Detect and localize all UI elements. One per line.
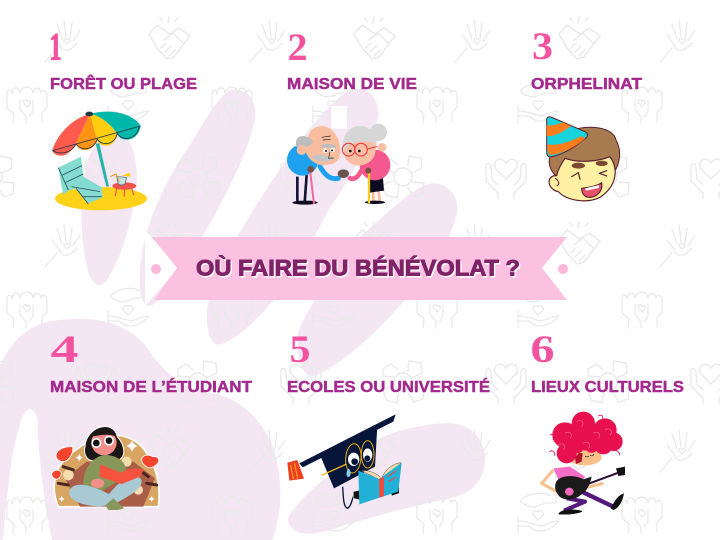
banner title: OÙ FAIRE DU BÉNÉVOLAT ? — [196, 256, 520, 281]
banner left dot — [151, 264, 161, 274]
banner — [145, 230, 568, 306]
item 5 — [287, 328, 490, 508]
background blobs — [0, 89, 485, 540]
number 3: 3 — [532, 25, 553, 68]
item 3 — [531, 25, 643, 201]
label 5: ECOLES OU UNIVERSITÉ — [287, 379, 490, 396]
icon: girl reading — [52, 426, 159, 510]
label 2: MAISON DE VIE — [287, 76, 417, 93]
item 4 — [50, 328, 253, 510]
number 1: 1 — [50, 26, 62, 68]
icon: graduation cap with book — [287, 414, 402, 508]
icon: elderly couple — [287, 106, 390, 205]
icon: party boy — [547, 117, 620, 201]
item 6 — [530, 328, 684, 515]
number 2: 2 — [288, 26, 308, 69]
item 2 — [287, 26, 417, 205]
label 3: ORPHELINAT — [531, 76, 643, 93]
label 1: FORÊT OU PLAGE — [50, 75, 197, 93]
banner title: OÙ FAIRE DU BÉNÉVOLAT ? — [197, 257, 521, 282]
number 6: 6 — [530, 328, 554, 371]
icon: beach umbrella — [52, 112, 147, 210]
icon: rock guitarist — [542, 412, 625, 515]
label 4: MAISON DE L’ÉTUDIANT — [50, 379, 253, 396]
label 6: LIEUX CULTURELS — [531, 379, 684, 396]
item 1 — [50, 26, 197, 210]
number 5: 5 — [290, 328, 310, 371]
banner right dot — [558, 264, 568, 274]
number 4: 4 — [50, 328, 78, 371]
